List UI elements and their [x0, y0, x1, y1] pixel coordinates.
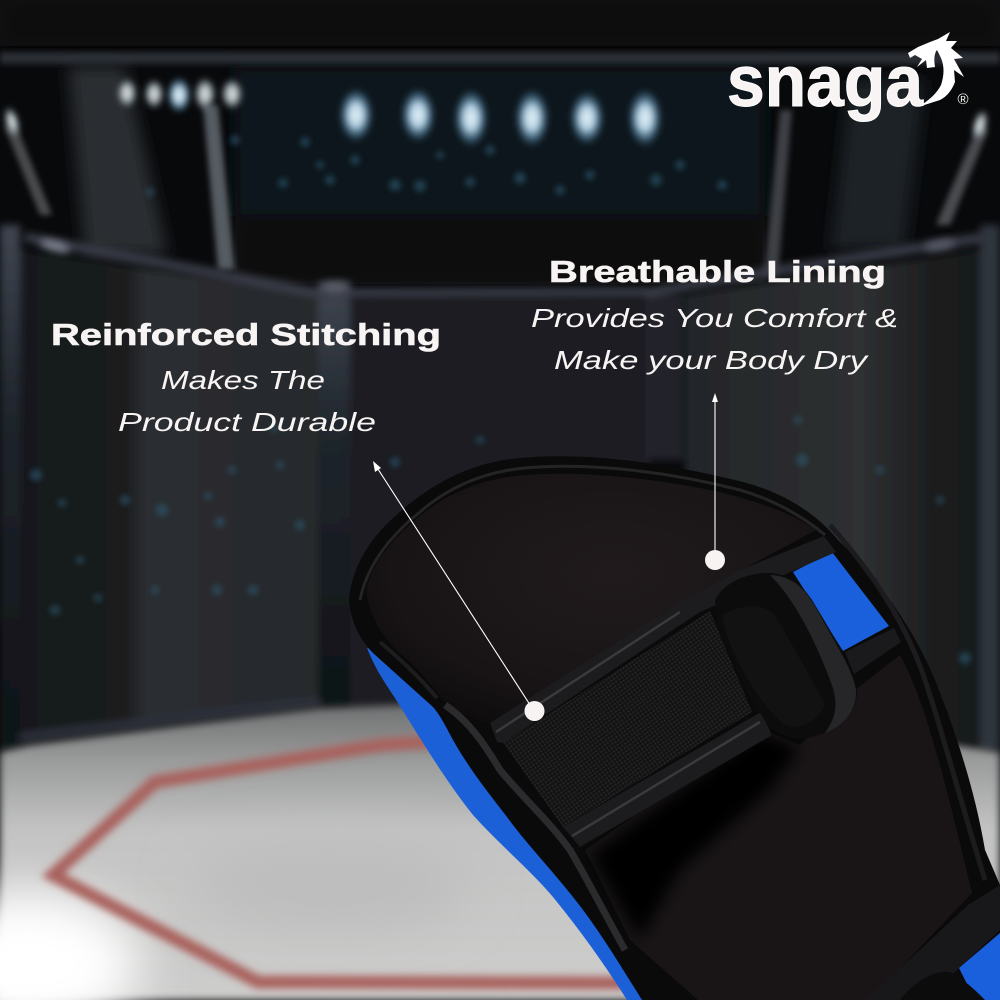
black binding and padding silhouette — [349, 456, 1000, 1000]
wordmark: snaga — [727, 42, 924, 122]
blue outer shell — [367, 648, 648, 1000]
arena beams and poles — [0, 52, 1000, 275]
arena upper structure — [0, 0, 1000, 284]
bottom tab — [900, 972, 985, 1000]
shin guard product — [349, 456, 1000, 1000]
velcro tab — [715, 573, 857, 739]
floor: canvas with octagon marking — [0, 705, 1000, 1000]
upper binding highlight stitching — [360, 466, 825, 600]
right binding highlight — [830, 525, 985, 880]
left binding highlight — [445, 705, 625, 950]
description: Provides You Comfort & — [531, 303, 898, 333]
description — [118, 365, 376, 437]
strap upper binding — [490, 536, 836, 743]
callout: reinforced stitching — [51, 317, 544, 721]
strap lower binding — [563, 712, 772, 847]
heading: Reinforced Stitching — [51, 317, 441, 352]
callout: breathable lining — [531, 254, 898, 570]
logo: snaga — [727, 32, 969, 122]
description: Make your Body Dry — [554, 345, 870, 375]
upper breathable lining — [366, 474, 816, 723]
rail highlights — [38, 237, 957, 292]
octagon red line — [53, 741, 640, 983]
heading: Breathable Lining — [549, 254, 886, 289]
arena lights — [0, 76, 992, 148]
white glare bottom-left — [0, 890, 140, 1000]
description: Makes The — [161, 365, 325, 395]
lower lining — [585, 655, 972, 1000]
strap mesh panel — [503, 611, 752, 827]
registered mark: ® — [957, 91, 969, 108]
crowd lights — [30, 135, 971, 664]
cage panels, rails and posts — [0, 225, 1000, 750]
arrow and dot — [705, 393, 725, 570]
blue band behind tab — [793, 552, 889, 651]
bottom strap and blue corner — [866, 885, 1000, 1000]
description — [531, 303, 898, 375]
description: Product Durable — [118, 407, 376, 437]
icon: dragon head — [908, 32, 964, 107]
arrow and dot — [373, 461, 544, 721]
